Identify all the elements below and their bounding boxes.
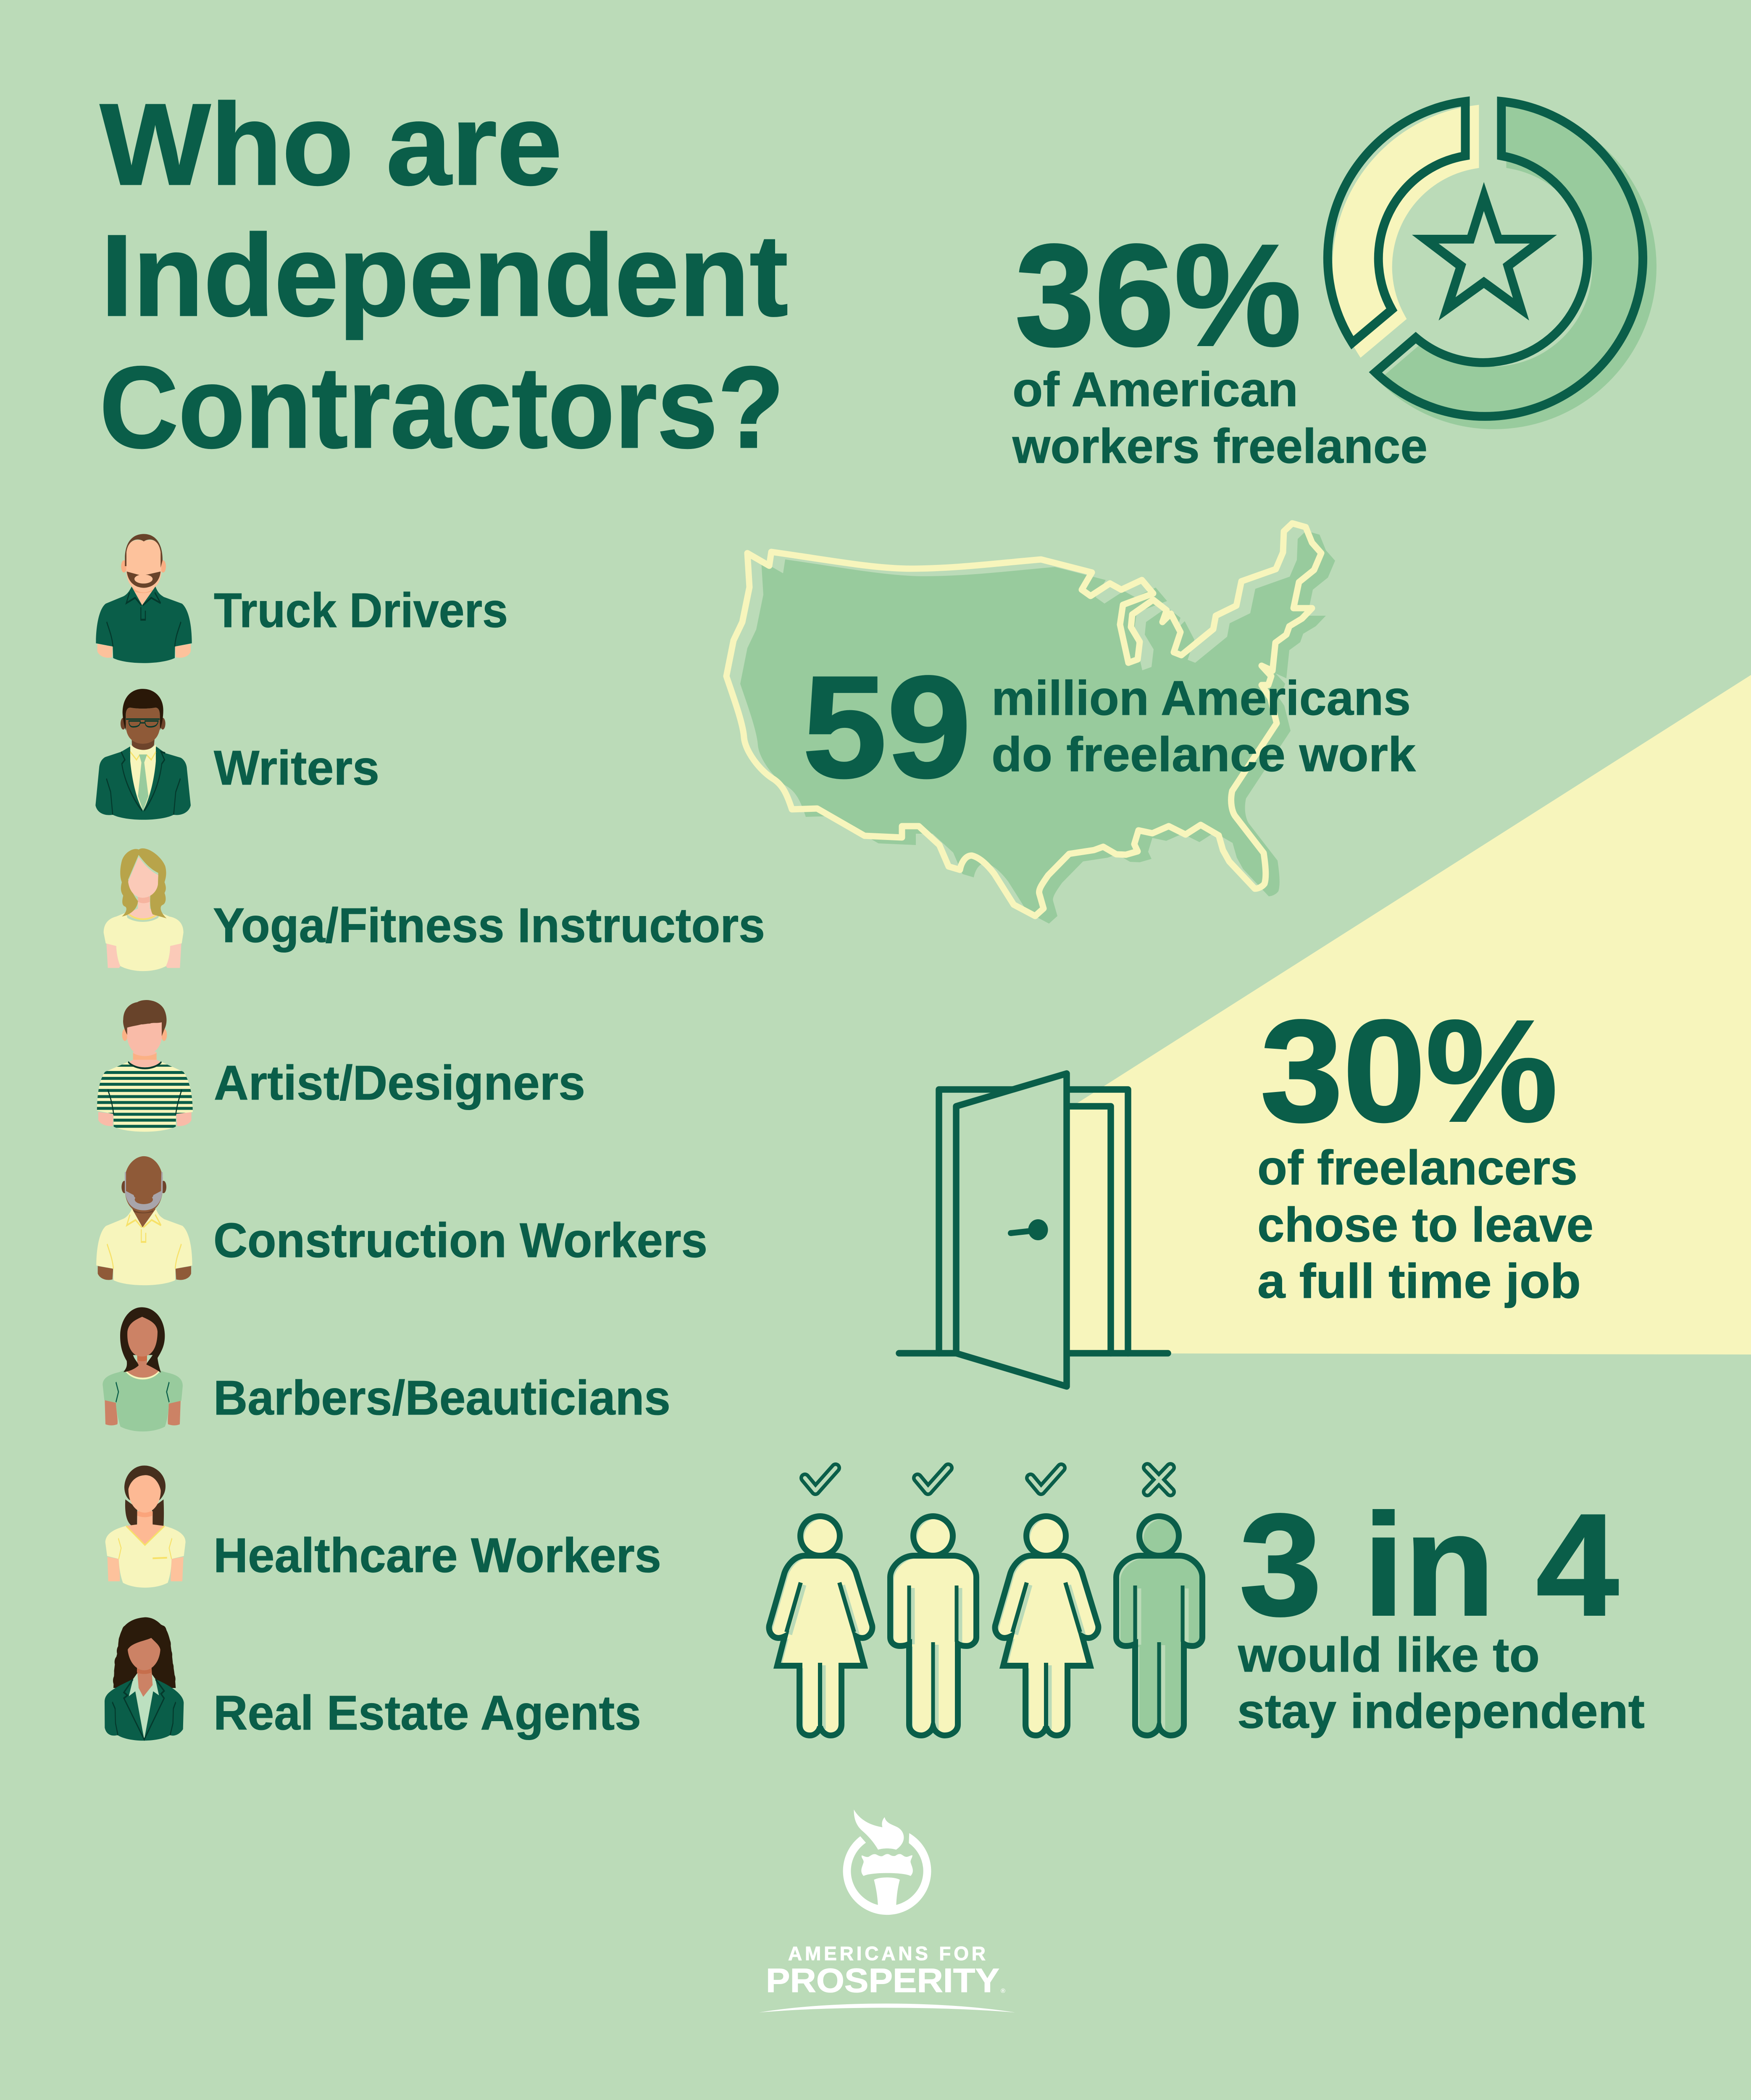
check mark 2	[918, 1468, 948, 1491]
icon: barber	[103, 1307, 183, 1431]
icon: yoga instructor	[104, 848, 184, 971]
icon: truck driver	[96, 534, 192, 663]
stat: 30 percent	[1257, 990, 1593, 1308]
label: real estate agents: Real Estate Agents	[213, 1685, 641, 1740]
stat: 36 percent	[1012, 215, 1428, 473]
label: yoga/fitness instructors: Yoga/Fitness Instructors	[213, 898, 765, 953]
title	[100, 80, 788, 472]
logo: Americans for Prosperity: ®	[1001, 1987, 1005, 1995]
figure 2: man	[890, 1516, 980, 1738]
US map	[726, 523, 1335, 924]
label: truck drivers: Truck Drivers	[214, 583, 508, 638]
title: Who are	[100, 80, 562, 209]
title: Contractors?	[100, 343, 784, 472]
label: artist/designers: Artist/Designers	[214, 1055, 585, 1110]
label: barbers/beauticians: Barbers/Beauticians	[213, 1370, 670, 1425]
logo: Americans for Prosperity: AMERICANS FOR	[788, 1942, 986, 1964]
check mark 1	[805, 1468, 836, 1491]
stat: 59 million: do freelance work	[991, 727, 1416, 782]
four people pictogram	[769, 1467, 1207, 1738]
cross mark	[1147, 1467, 1170, 1492]
stat: 30 percent: of freelancers	[1257, 1140, 1577, 1195]
stat: 3 in 4: would like to	[1238, 1628, 1540, 1682]
logo: Americans for Prosperity	[759, 1809, 1015, 2013]
donut chart with star	[1328, 102, 1652, 425]
icon: healthcare worker	[105, 1465, 186, 1588]
icon: writer	[95, 689, 191, 820]
figure 3: woman	[995, 1516, 1102, 1738]
stat: 30 percent: chose to leave	[1257, 1197, 1593, 1252]
open door icon	[899, 1074, 1168, 1386]
icon: real estate agent	[105, 1617, 184, 1740]
stat: 36 percent: workers freelance	[1012, 419, 1428, 473]
logo: Americans for Prosperity: PROSPERITY	[766, 1962, 999, 2000]
stat: 36 percent: of American	[1012, 362, 1298, 417]
stat: 59 million	[802, 646, 1416, 808]
stat: 3 in 4: stay independent	[1237, 1684, 1645, 1738]
figure 4: man, not independent	[1116, 1516, 1207, 1738]
title: Independent	[101, 211, 788, 341]
figure 1: woman	[769, 1516, 876, 1738]
icon: construction worker	[96, 1156, 192, 1285]
icon: artist	[95, 1000, 195, 1132]
stat: 3 in 4	[1237, 1484, 1645, 1738]
label: construction workers: Construction Workers	[213, 1213, 707, 1268]
light beam from open door	[1070, 675, 1751, 1354]
stat: 59 million: million Americans	[991, 671, 1411, 725]
stat: 30 percent: 30%	[1260, 990, 1558, 1152]
check mark 3	[1031, 1468, 1061, 1491]
stat: 3 in 4: 3 in 4	[1239, 1484, 1620, 1646]
label: writers: Writers	[214, 740, 379, 795]
stat: 59 million: 59	[802, 646, 971, 808]
stat: 36 percent: 36%	[1015, 215, 1301, 376]
logo torch icon	[759, 1809, 1015, 2013]
stat: 30 percent: a full time job	[1257, 1254, 1581, 1308]
label: healthcare workers: Healthcare Workers	[213, 1528, 661, 1583]
